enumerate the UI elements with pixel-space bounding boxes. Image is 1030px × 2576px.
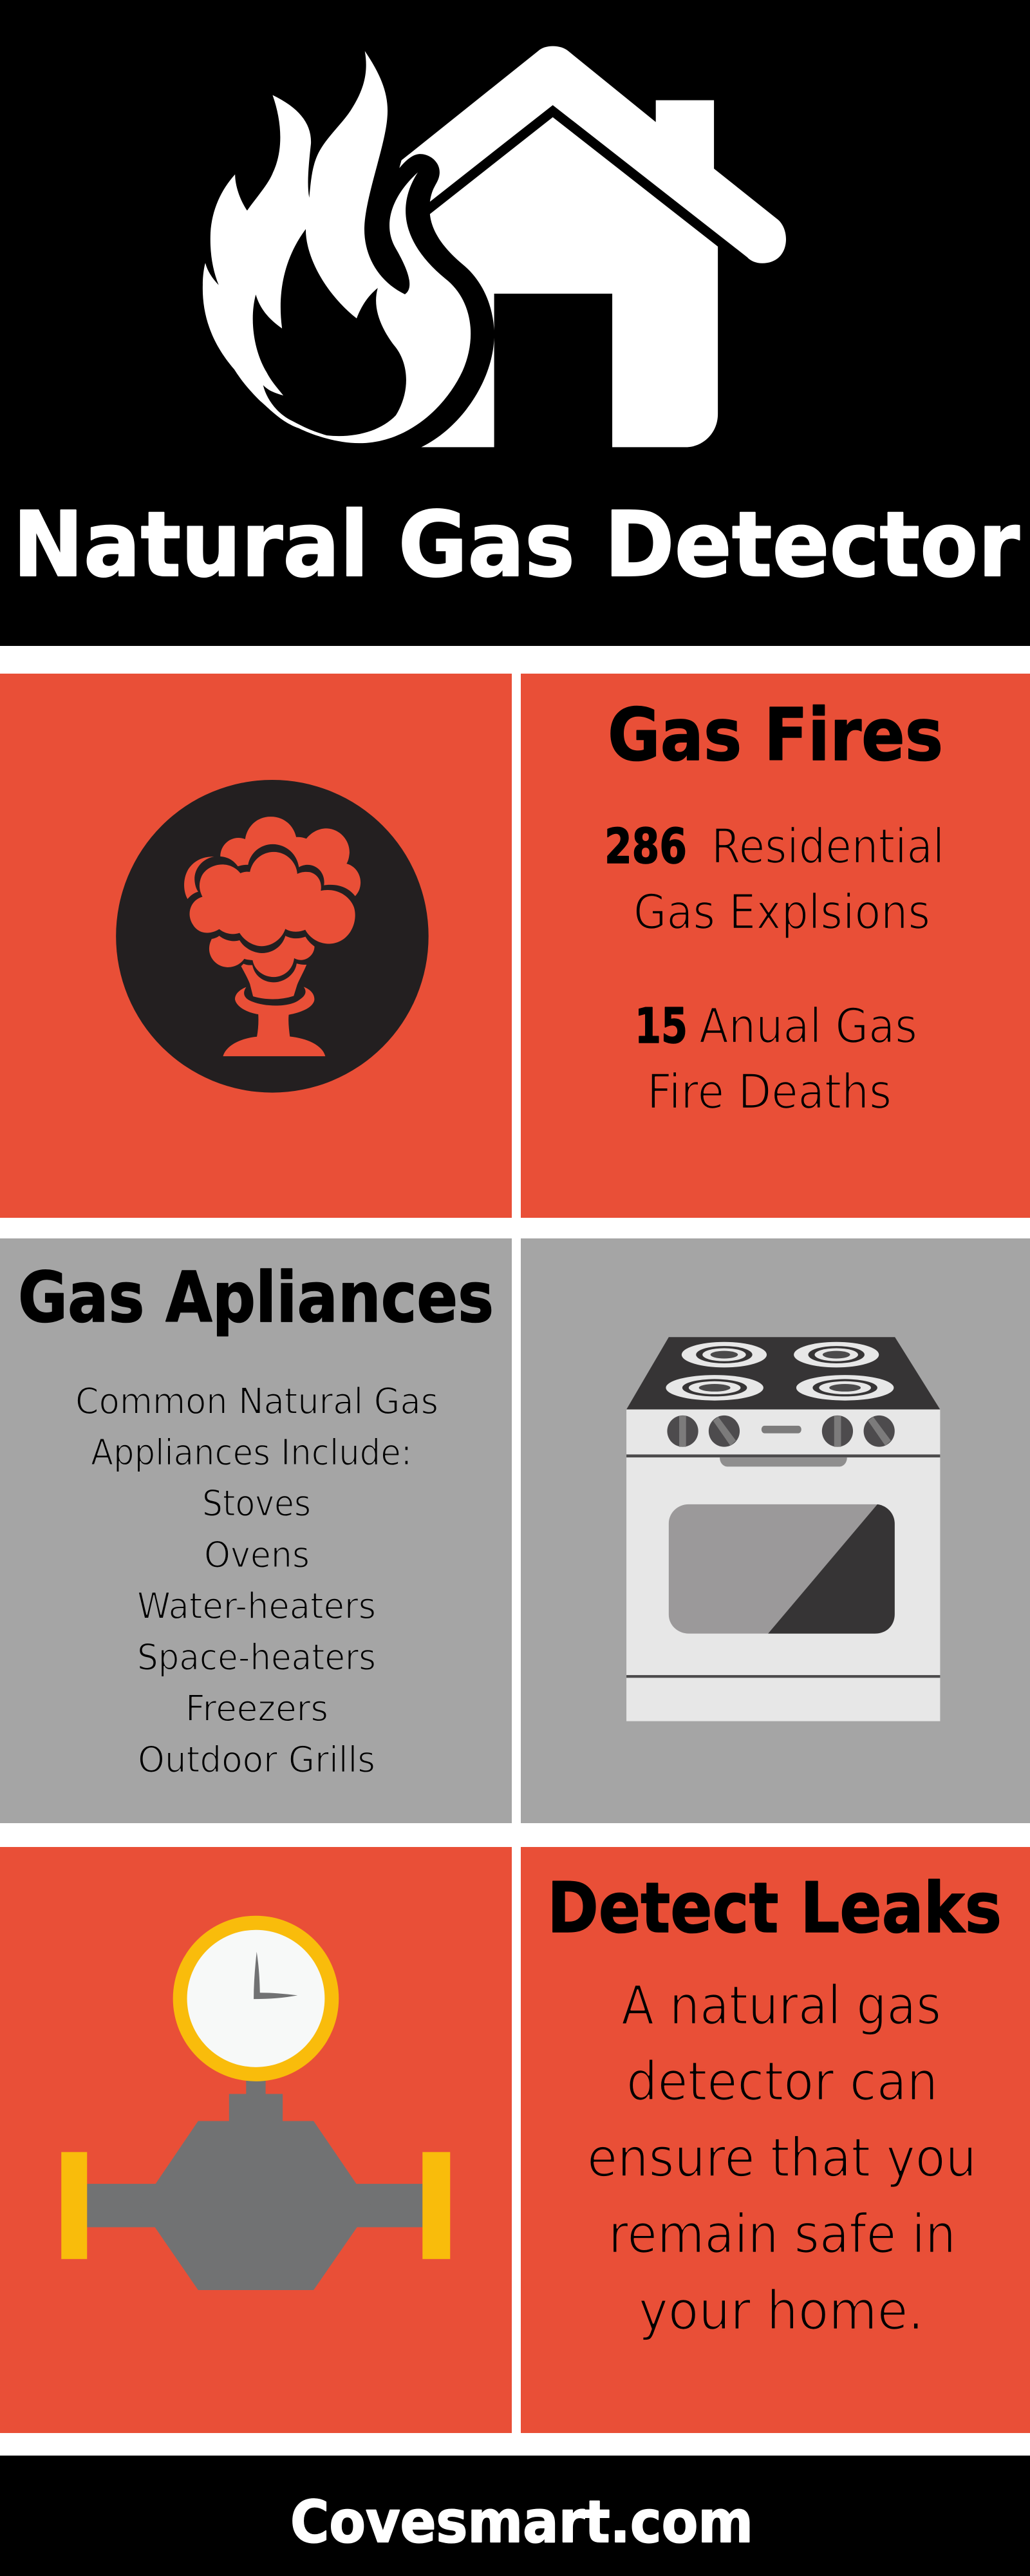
panel: footer <box>0 2456 1030 2576</box>
stat: 15 annual gas fire deaths: Anual Gas <box>699 998 917 1054</box>
body text: detector can <box>626 2050 938 2113</box>
panel: gas fires text <box>521 674 1030 1218</box>
stat: 15 annual gas fire deaths: 15 <box>635 998 688 1054</box>
stat: 286 residential gas explosions <box>604 818 944 940</box>
body text: your home. <box>639 2279 924 2342</box>
body text: remain safe in <box>608 2202 956 2266</box>
appliance list <box>75 1381 438 1781</box>
stat: 15 annual gas fire deaths: Fire Deaths <box>647 1063 892 1120</box>
appliance list: Space-heaters <box>137 1637 376 1678</box>
appliance list: Common Natural Gas <box>75 1381 438 1423</box>
body text <box>587 1974 977 2342</box>
footer website: Covesmart.com <box>290 2488 753 2556</box>
icon: explosion mushroom cloud <box>116 780 429 1093</box>
appliance list: Outdoor Grills <box>138 1739 375 1781</box>
panel: gas appliances text <box>0 1238 512 1823</box>
stat: 286 residential gas explosions: Residential <box>711 818 944 875</box>
stat: 286 residential gas explosions: 286 <box>604 818 687 875</box>
panel: gas meter illustration <box>0 1847 512 2433</box>
heading: gas fires: Gas Fires <box>608 694 943 777</box>
heading: gas appliances: Gas Apliances <box>18 1258 494 1338</box>
icon: house on fire <box>203 46 786 447</box>
stat: 15 annual gas fire deaths <box>635 998 917 1120</box>
panel: gas fires icon <box>0 674 512 1218</box>
appliance list: Freezers <box>185 1688 328 1730</box>
appliance list: Water-heaters <box>137 1586 376 1627</box>
body text: A natural gas <box>621 1974 941 2037</box>
appliance list: Ovens <box>204 1534 310 1577</box>
body text: ensure that you <box>587 2126 977 2190</box>
appliance list: Appliances Include: <box>91 1432 412 1473</box>
panel: header <box>0 0 1030 646</box>
appliance list: Stoves <box>202 1482 311 1525</box>
panel: detect leaks text <box>521 1847 1030 2433</box>
icon: stove <box>626 1337 940 1721</box>
icon: gas meter with gauge <box>61 1916 450 2290</box>
stat: 286 residential gas explosions: Gas Explsions <box>633 884 930 940</box>
panel: stove illustration <box>521 1238 1030 1823</box>
